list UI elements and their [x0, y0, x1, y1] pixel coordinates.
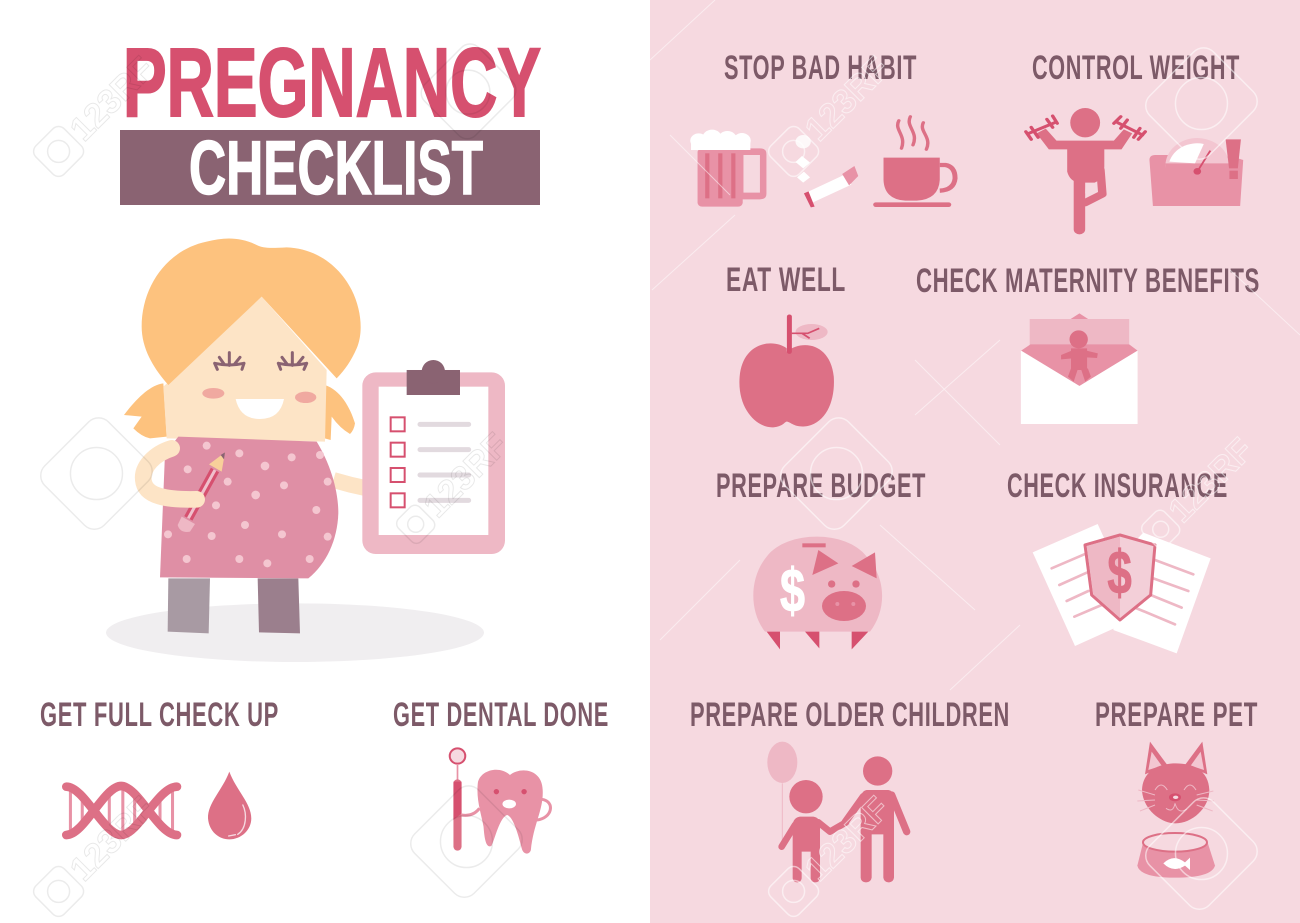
icons: children and pet	[767, 742, 1215, 882]
icon: weighing scale folder	[1149, 138, 1243, 206]
icon: blood drop	[208, 772, 251, 839]
watermarks: 123RF	[798, 50, 897, 149]
icon: apple	[739, 317, 834, 427]
icon: insurance documents and shield: $	[1107, 538, 1132, 607]
icon: coffee cup	[876, 117, 955, 205]
icon: cat with food bowl	[1137, 742, 1215, 878]
heading: prepare older children: PREPARE OLDER CHILDREN	[690, 696, 1010, 734]
watermarks: 123RF	[63, 50, 162, 149]
watermarks: 123RF	[416, 426, 515, 525]
icon: piggy bank: $	[780, 557, 805, 626]
watermarks: 123RF	[63, 790, 162, 889]
icons: budget and insurance	[753, 524, 1211, 653]
panel: right background	[650, 0, 1300, 923]
banner: checklist: CHECKLIST	[189, 126, 483, 211]
heading: prepare budget: PREPARE BUDGET	[716, 467, 926, 505]
heading: get dental done: GET DENTAL DONE	[393, 696, 609, 734]
icon: tooth with dental mirror	[450, 748, 550, 854]
icon: beer mug	[690, 130, 766, 207]
icon: cigarette	[796, 135, 858, 207]
icons: check up and dental	[66, 748, 550, 854]
heading: get full check up: GET FULL CHECK UP	[40, 696, 279, 734]
icon: piggy bank	[753, 537, 882, 649]
illustration: pregnant woman with clipboard	[106, 239, 505, 662]
icon: person exercising	[1026, 108, 1145, 229]
icon: maternity benefits envelope	[1021, 313, 1138, 424]
icons: upper right group	[690, 108, 1243, 427]
title: pregnancy: PREGNANCY	[123, 28, 541, 137]
watermarks: 123RF	[798, 790, 897, 889]
banner: checklist	[120, 126, 540, 211]
heading: stop bad habit: STOP BAD HABIT	[724, 49, 917, 87]
heading: eat well: EAT WELL	[726, 261, 846, 299]
icon: DNA helix	[66, 786, 177, 835]
icon: older children with balloon	[767, 742, 907, 882]
icon: insurance documents and shield	[1033, 524, 1211, 653]
watermarks: 123RF	[1161, 431, 1260, 530]
